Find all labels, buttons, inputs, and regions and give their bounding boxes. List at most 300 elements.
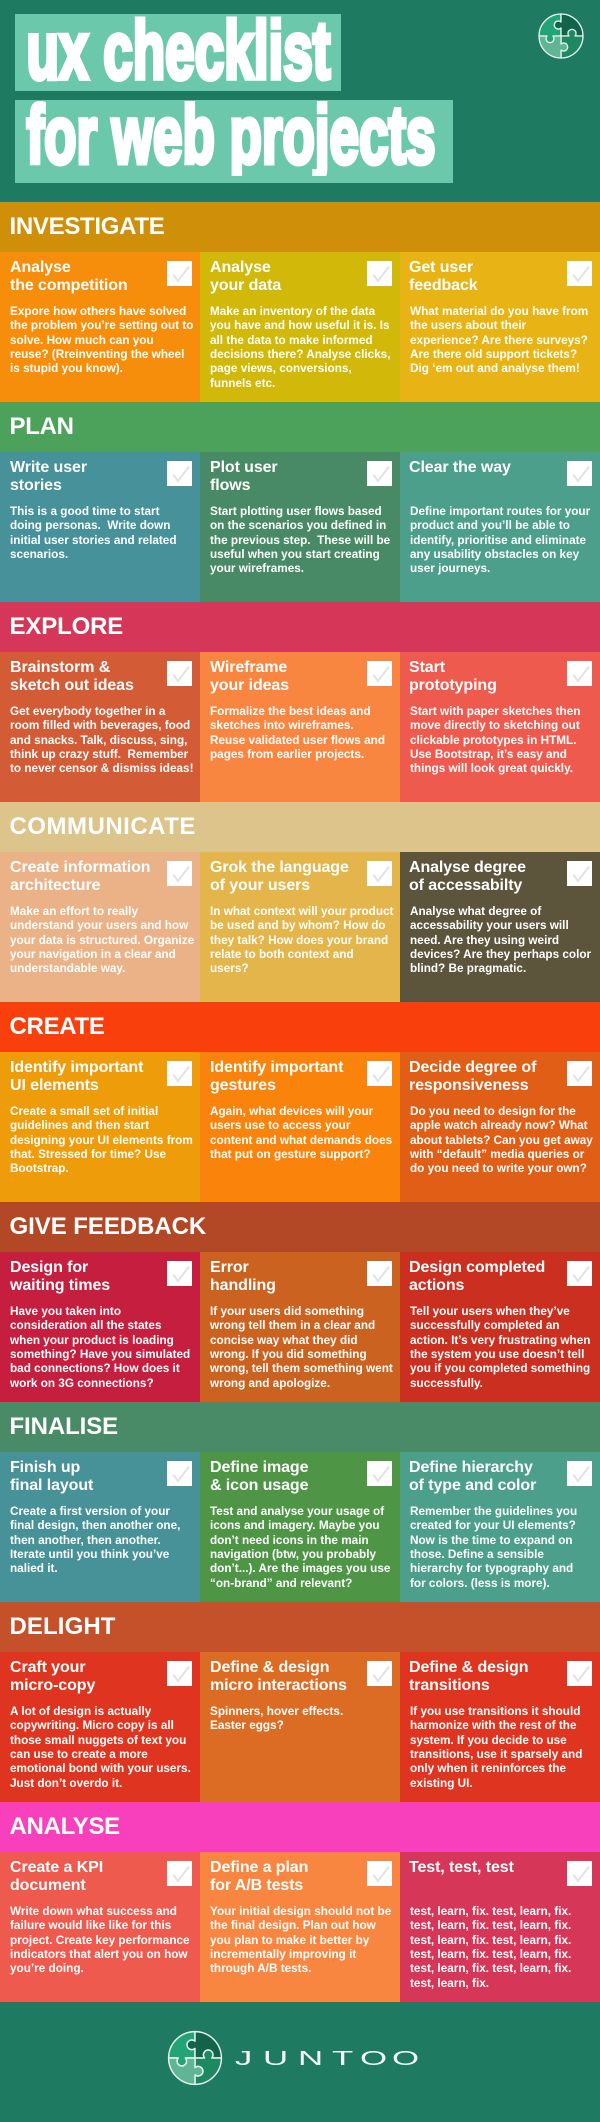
card text: Formalize the best ideas and xyxy=(210,705,371,718)
card: grok the language of your users xyxy=(200,852,400,1002)
heading: investigate xyxy=(0,202,600,252)
card title xyxy=(210,858,349,894)
card text: Write down what success and xyxy=(10,1905,177,1918)
card text: the users about their xyxy=(410,319,526,332)
card title xyxy=(409,1658,528,1694)
card text: A lot of design is actually xyxy=(10,1705,151,1718)
card title xyxy=(210,1058,343,1094)
card title xyxy=(210,1458,308,1494)
card title: handling xyxy=(210,1276,276,1294)
card text xyxy=(210,1905,391,1977)
section: give feedback xyxy=(0,1202,600,1402)
card title xyxy=(409,858,526,894)
card text: don’t...). Are the images you use xyxy=(210,1562,390,1575)
card text xyxy=(410,905,591,975)
card: test, test, test xyxy=(400,1852,600,2002)
card title: Design for xyxy=(10,1258,88,1276)
card: decide degree of responsiveness xyxy=(400,1052,600,1202)
card: define image and icon usage xyxy=(200,1452,400,1602)
card text: those. Define a sensible xyxy=(410,1548,544,1561)
section: analyse xyxy=(0,1802,600,2002)
card text: when your product is loading xyxy=(10,1334,174,1346)
card text: test, learn, fix. xyxy=(410,1977,489,1990)
card text: experience? Are there surveys? xyxy=(410,334,588,346)
card text: your data is structured. Organize xyxy=(10,934,194,946)
card text xyxy=(10,305,193,375)
icon: checkbox xyxy=(167,1061,192,1086)
card text: reuse? (Rreinventing the wheel xyxy=(10,348,184,361)
card title: Get user xyxy=(409,258,473,276)
card text: Create a small set of initial xyxy=(10,1105,158,1118)
card text: Again, what devices will your xyxy=(210,1105,373,1118)
section: create xyxy=(0,1002,600,1202)
card title: Decide degree of xyxy=(409,1058,536,1076)
icon: checkbox xyxy=(167,1661,192,1686)
card text: the problem you’re setting out to xyxy=(10,319,193,332)
card title: stories xyxy=(10,476,62,494)
card text: the previous step. These will be xyxy=(210,534,390,546)
card text: on the scenarios you defined in xyxy=(210,519,386,532)
card title: Create a KPI xyxy=(10,1858,103,1876)
card text: wrong. If you did something xyxy=(210,1348,367,1361)
card text: What material do you have from xyxy=(410,305,588,318)
card: start prototyping xyxy=(400,652,600,802)
card text xyxy=(210,705,385,761)
card text: scenarios. xyxy=(10,548,68,561)
card text xyxy=(10,1705,191,1791)
icon: checkbox xyxy=(367,261,392,286)
card text: wrong and apologize. xyxy=(210,1377,330,1390)
card text: initial user stories and related xyxy=(10,534,177,546)
card: identify important ui elements xyxy=(0,1052,200,1202)
card: plot user flows xyxy=(200,452,400,602)
brand name: juntoo xyxy=(230,2042,425,2072)
icon: checkbox xyxy=(167,861,192,886)
card text: that put on gesture support? xyxy=(210,1148,371,1161)
brand name: juntoo: N xyxy=(298,2047,323,2070)
card text: nalied it. xyxy=(10,1562,58,1575)
card text: Do you need to design for the xyxy=(410,1105,576,1118)
card text: test, learn, fix. test, learn, fix. xyxy=(410,1934,571,1946)
icon: checkbox xyxy=(367,1461,392,1486)
hero header xyxy=(15,13,584,183)
card text xyxy=(410,1105,593,1177)
card: define and design micro interactions xyxy=(200,1652,400,1802)
card text: to never censor & dismiss ideas! xyxy=(10,762,194,775)
card title xyxy=(10,1458,93,1494)
icon: checkbox xyxy=(367,461,392,486)
card title xyxy=(10,1258,110,1294)
icon: checkbox xyxy=(167,1861,192,1886)
card title: Analyse xyxy=(210,258,271,276)
card title xyxy=(409,658,497,694)
icon: checkbox xyxy=(567,461,592,486)
card title: & icon usage xyxy=(210,1476,308,1494)
card text: those small nuggets of text you xyxy=(10,1734,186,1746)
card text xyxy=(10,905,194,975)
card title: Error xyxy=(210,1258,249,1276)
card text xyxy=(410,705,580,775)
card text xyxy=(10,1105,193,1177)
card title: Test, test, test xyxy=(409,1858,514,1876)
heading: plan: PLAN xyxy=(10,413,74,440)
card text: with “default” media queries or xyxy=(410,1148,584,1161)
card text: consideration all the states xyxy=(10,1319,162,1332)
card text: Bootstrap. xyxy=(10,1162,69,1175)
heading: give feedback: GIVE FEEDBACK xyxy=(10,1213,206,1240)
card title: of your users xyxy=(210,876,310,894)
card text: If you use transitions it should xyxy=(410,1705,580,1718)
card text: content and what demands does xyxy=(210,1134,392,1146)
card text: Are there old support tickets? xyxy=(410,348,577,361)
icon: checkbox xyxy=(367,1261,392,1286)
card text: identify, prioritise and eliminate xyxy=(410,534,586,546)
card title xyxy=(409,1258,545,1294)
card text: successfully completed an xyxy=(410,1319,560,1332)
card title xyxy=(210,658,289,694)
card text: copywriting. Micro copy is all xyxy=(10,1719,174,1732)
card text xyxy=(410,1705,582,1791)
card text: existing UI. xyxy=(410,1777,473,1790)
icon: checkbox xyxy=(367,1661,392,1686)
card text: can use to create a more xyxy=(10,1748,148,1761)
card title xyxy=(10,258,128,294)
card text xyxy=(210,1105,392,1162)
card title: architecture xyxy=(10,876,100,894)
card title: feedback xyxy=(409,276,478,294)
card text: action. It’s very frustrating when xyxy=(410,1334,590,1346)
card text: any usability obstacles on key xyxy=(410,548,579,561)
card text: then another, then another. xyxy=(10,1534,161,1546)
card text: page views, conversions, xyxy=(210,362,352,375)
card title: Brainstorm & xyxy=(10,658,110,676)
brand name: juntoo: O xyxy=(392,2047,419,2070)
card text: failure would like like for this xyxy=(10,1919,171,1932)
card text: project. Create key performance xyxy=(10,1934,190,1946)
card text: work on 3G connections? xyxy=(10,1377,154,1390)
card: analyse the competition xyxy=(0,252,200,402)
card text: Your initial design should not be xyxy=(210,1905,391,1918)
card text: useful when you start creating xyxy=(210,548,380,561)
card title xyxy=(10,1858,103,1894)
card title: transitions xyxy=(409,1676,490,1694)
card text: funnels etc. xyxy=(210,377,275,390)
card: finish up final layout xyxy=(0,1452,200,1602)
card text: test, learn, fix. test, learn, fix. xyxy=(410,1919,571,1932)
card text: Define important routes for your xyxy=(410,505,590,518)
section: plan xyxy=(0,402,600,602)
card text: pages from earlier projects. xyxy=(210,748,364,761)
heading: analyse xyxy=(0,1802,600,1852)
card title: Plot user xyxy=(210,458,278,476)
card text: do you need to write your own? xyxy=(410,1162,587,1175)
title: ux checklist for web projects xyxy=(15,14,453,183)
title: ux checklist for web projects: ux checklist xyxy=(26,6,330,96)
card text: icons and imagery. Maybe you xyxy=(210,1519,380,1532)
card text: users? xyxy=(210,962,249,975)
heading: finalise xyxy=(0,1402,600,1452)
card text: move directly to sketching out xyxy=(410,719,580,732)
card text: users use to access your xyxy=(210,1119,350,1132)
section: delight xyxy=(0,1602,600,1802)
card title: final layout xyxy=(10,1476,93,1494)
card text: accessability your users will xyxy=(410,919,569,932)
card text: sketches into wireframes. xyxy=(210,719,354,732)
card title: Identify important xyxy=(10,1058,143,1076)
card title xyxy=(210,258,282,294)
card text: transitions, use it sparsely and xyxy=(410,1748,582,1761)
card text: “on-brand” and relevant? xyxy=(210,1577,352,1590)
icon: checkbox xyxy=(367,861,392,886)
card text: successfully. xyxy=(410,1377,483,1390)
card text xyxy=(210,905,394,975)
heading: investigate: INVESTIGATE xyxy=(10,213,164,240)
heading: explore xyxy=(0,602,600,652)
card: get user feedback xyxy=(400,252,600,402)
card text: Get everybody together in a xyxy=(10,705,165,718)
card text: your wireframes. xyxy=(210,562,304,575)
card: analyse degree of accessabilty xyxy=(400,852,600,1002)
card title: Define & design xyxy=(409,1658,528,1676)
card text: doing personas. Write down xyxy=(10,519,170,532)
card title: Analyse degree xyxy=(409,858,526,876)
card title: micro interactions xyxy=(210,1676,347,1694)
heading: delight: DELIGHT xyxy=(10,1613,116,1640)
heading: communicate xyxy=(0,802,600,852)
card text: about tablets? Can you get away xyxy=(410,1134,593,1146)
card text: product and you’ll be able to xyxy=(410,519,570,532)
icon: checkbox xyxy=(567,1661,592,1686)
card text: Tell your users when they’ve xyxy=(410,1305,570,1318)
card text: Easter eggs? xyxy=(210,1719,284,1732)
card text xyxy=(10,1905,190,1977)
card title: prototyping xyxy=(409,676,497,694)
icon: checkbox xyxy=(567,1061,592,1086)
card title: Finish up xyxy=(10,1458,80,1476)
card title: Wireframe xyxy=(210,658,287,676)
card text: guidelines and then start xyxy=(10,1119,149,1132)
card title: waiting times xyxy=(10,1276,110,1294)
card: design completed actions xyxy=(400,1252,600,1402)
card: identify important gestures xyxy=(200,1052,400,1202)
heading: give feedback xyxy=(0,1202,600,1252)
card text xyxy=(410,505,590,575)
card: define and design transitions xyxy=(400,1652,600,1802)
card text: blind? Be pragmatic. xyxy=(410,962,526,975)
card title: for A/B tests xyxy=(210,1876,303,1894)
card text: Remember the guidelines you xyxy=(410,1505,577,1518)
card title: Grok the language xyxy=(210,858,349,876)
heading: communicate: COMMUNICATE xyxy=(10,813,196,840)
card text xyxy=(210,1705,343,1734)
card title: Analyse xyxy=(10,258,71,276)
card text: wrong, tell them something went xyxy=(210,1362,393,1375)
card text: Reuse validated user flows and xyxy=(210,734,385,746)
card text: hierarchy for typography and xyxy=(410,1562,573,1575)
card: design for waiting times xyxy=(0,1252,200,1402)
heading: create: CREATE xyxy=(10,1013,105,1040)
card text xyxy=(210,1505,390,1591)
heading: finalise: FINALISE xyxy=(10,1413,118,1440)
card text: Analyse what degree of xyxy=(410,905,541,918)
card text: Make an inventory of the data xyxy=(210,305,375,318)
card text: Start with paper sketches then xyxy=(410,705,580,718)
card text xyxy=(210,505,390,575)
card text: the final design. Plan out how xyxy=(210,1919,376,1932)
brand name: juntoo: O xyxy=(360,2047,387,2070)
card text: concise way what they did xyxy=(210,1334,358,1346)
icon: checkbox xyxy=(567,661,592,686)
card text: This is a good time to start xyxy=(10,505,160,518)
card text xyxy=(10,1305,190,1391)
card text: think up crazy stuff. Remember xyxy=(10,748,188,761)
card text: test, learn, fix. test, learn, fix. xyxy=(410,1905,571,1918)
card text: bad connections? How does it xyxy=(10,1362,180,1375)
footer xyxy=(0,2002,600,2122)
card text: something? Have you simulated xyxy=(10,1348,190,1361)
card text: you plan to make it better by xyxy=(210,1934,369,1946)
card text: the system you use doesn’t tell xyxy=(410,1348,584,1361)
card title: of accessabilty xyxy=(409,876,522,894)
card text: Create a first version of your xyxy=(10,1505,170,1518)
card text xyxy=(10,705,194,775)
card text xyxy=(210,1305,393,1391)
heading: plan xyxy=(0,402,600,452)
card text: relate to both context and xyxy=(210,948,354,961)
card title xyxy=(10,458,87,494)
card text: don’t need icons in the main xyxy=(210,1534,369,1546)
brand name: juntoo: J xyxy=(235,2047,252,2070)
card title: actions xyxy=(409,1276,464,1294)
card text: emotional bond with your users. xyxy=(10,1762,191,1775)
icon: checkbox xyxy=(367,1061,392,1086)
card: craft your micro-copy xyxy=(0,1652,200,1802)
card: analyse your data xyxy=(200,252,400,402)
icon: checkbox xyxy=(167,461,192,486)
card title: Create information xyxy=(10,858,150,876)
card text: test, learn, fix. test, learn, fix. xyxy=(410,1948,571,1961)
card title xyxy=(10,858,150,894)
card title: flows xyxy=(210,476,250,494)
icon: checkbox xyxy=(567,1261,592,1286)
card text: you’re doing. xyxy=(10,1962,84,1975)
heading: explore: EXPLORE xyxy=(10,613,123,640)
card: define hierarchy of type and color xyxy=(400,1452,600,1602)
card title xyxy=(210,1258,276,1294)
card title: Clear the way xyxy=(409,458,511,476)
card title: sketch out ideas xyxy=(10,676,134,694)
icon: juntoo puzzle logo small xyxy=(538,13,584,59)
card text: through A/B tests. xyxy=(210,1962,311,1975)
card: error handling xyxy=(200,1252,400,1402)
card text: is stupid you know). xyxy=(10,362,123,375)
card title: micro-copy xyxy=(10,1676,95,1694)
card text: things will look great quickly. xyxy=(410,762,573,775)
card text: for colors. (less is more). xyxy=(410,1577,550,1590)
card: create information architecture xyxy=(0,852,200,1002)
card text: wrong tell them in a clear and xyxy=(210,1319,375,1332)
card title: responsiveness xyxy=(409,1076,529,1094)
card text: understandable way. xyxy=(10,962,125,975)
card title xyxy=(210,458,278,494)
card title: the competition xyxy=(10,276,128,294)
card text: Dig ‘em out and analyse them! xyxy=(410,362,580,375)
card text: that. Stressed for time? Use xyxy=(10,1148,166,1161)
icon: checkbox xyxy=(567,1861,592,1886)
icon: checkbox xyxy=(367,1861,392,1886)
card title xyxy=(409,1458,536,1494)
card title xyxy=(10,658,134,694)
card text: decisions there? Analyse clicks, xyxy=(210,348,390,361)
card text xyxy=(210,305,390,390)
card text: If your users did something xyxy=(210,1305,364,1318)
section: communicate xyxy=(0,802,600,1002)
section: explore xyxy=(0,602,600,802)
card title: UI elements xyxy=(10,1076,99,1094)
card text: test, learn, fix. test, learn, fix. xyxy=(410,1962,571,1975)
card text: apple watch already now? What xyxy=(410,1119,588,1132)
section: investigate xyxy=(0,202,600,402)
card text xyxy=(10,1505,180,1577)
card title: your ideas xyxy=(210,676,289,694)
brand name: juntoo: T xyxy=(332,2047,353,2070)
card text: and snacks. Talk, discuss, sing, xyxy=(10,734,187,746)
card text: your navigation in a clear and xyxy=(10,948,176,961)
card: define a plan for a/b tests xyxy=(200,1852,400,2002)
card title: Start xyxy=(409,658,445,676)
card title: document xyxy=(10,1876,86,1894)
card text xyxy=(10,505,177,561)
card text: Iterate until you think you’ve xyxy=(10,1548,169,1561)
card title xyxy=(10,1658,95,1694)
card text: devices? Are they perhaps color xyxy=(410,948,591,961)
card text: indicators that alert you on how xyxy=(10,1948,188,1961)
card title: Define image xyxy=(210,1458,308,1476)
card text: Expore how others have solved xyxy=(10,305,186,318)
card text: designing your UI elements from xyxy=(10,1134,193,1146)
card title: gestures xyxy=(210,1076,276,1094)
card text: room filled with beverages, food xyxy=(10,719,190,732)
card text: clickable prototypes in HTML. xyxy=(410,734,576,746)
icon: checkbox xyxy=(567,1461,592,1486)
card title xyxy=(210,1858,308,1894)
card title: Define & design xyxy=(210,1658,329,1676)
icon: checkbox xyxy=(167,1261,192,1286)
card title xyxy=(210,1658,347,1694)
card text: created for your UI elements? xyxy=(410,1519,576,1532)
card text: user journeys. xyxy=(410,562,490,575)
card text: solve. How much can you xyxy=(10,334,154,346)
icon: checkbox xyxy=(167,261,192,286)
card text xyxy=(410,1505,577,1591)
card text: Spinners, hover effects. xyxy=(210,1705,343,1718)
icon: checkbox xyxy=(367,661,392,686)
card title: Design completed xyxy=(409,1258,545,1276)
card text: need. Are they using weird xyxy=(410,934,559,946)
card text: Test and analyse your usage of xyxy=(210,1505,384,1518)
icon: checkbox xyxy=(167,661,192,686)
card text: understand your users and how xyxy=(10,919,188,932)
card: brainstorm and sketch out ideas xyxy=(0,652,200,802)
card text: Just don’t overdo it. xyxy=(10,1777,122,1790)
card title: Identify important xyxy=(210,1058,343,1076)
card text xyxy=(410,1305,590,1391)
card text: you have and how useful it is. Is xyxy=(210,319,390,332)
card title xyxy=(10,1058,143,1094)
heading: analyse: ANALYSE xyxy=(10,1813,120,1840)
card text: Start plotting user flows based xyxy=(210,505,382,518)
card: create a kpi document xyxy=(0,1852,200,2002)
